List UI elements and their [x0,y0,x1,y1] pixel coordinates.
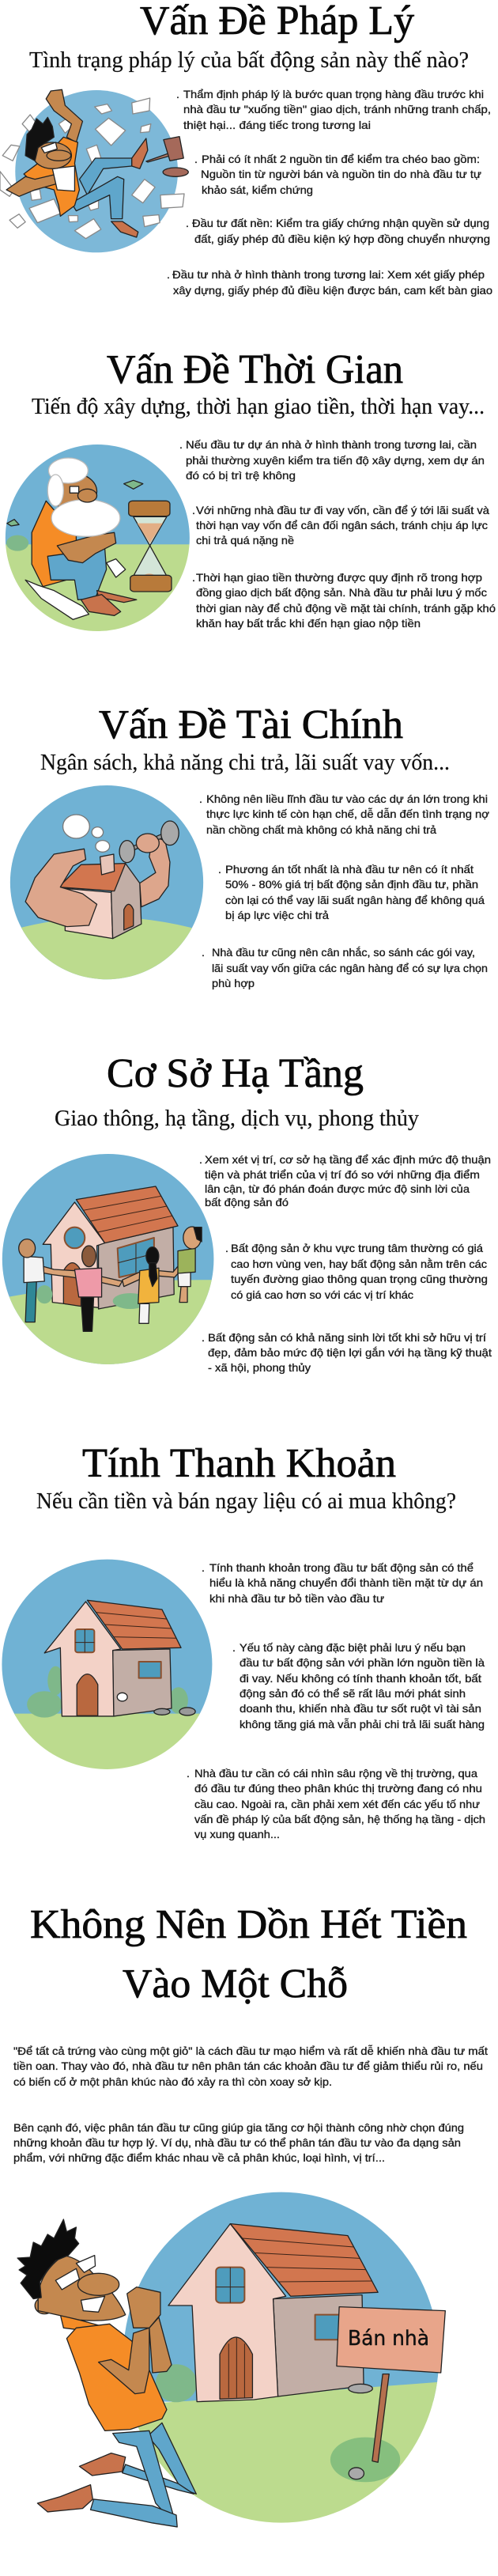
text: legal points: thiệt hại... đáng tiếc trong tương lai [183,119,371,131]
text: time points: . [179,438,183,451]
text: liquidity points: đầu tư bất động sản với phần lớn nguồn tiền là [240,1656,485,1669]
text: liquidity points: Nhà đầu tư cần có cái nhìn sâu rộng về thị trường, qua [194,1767,477,1780]
text: legal points: . [186,217,189,229]
text: infrastructure points: Xem xét vị trí, cơ sở hạ tầng để xác định mức độ thuận [205,1153,491,1166]
title: Vào Một Chỗ [123,1961,348,2007]
text: liquidity points: Yếu tố này càng đặc biệt phải lưu ý nếu bạn [240,1641,466,1654]
text: intro paragraphs: có biến cố ở một phân khúc nào đó xảy ra thì còn xoay sở kịp. [13,2075,332,2088]
text: legal points: đất, giấy phép đủ điều kiện ký hợp đồng chuyển nhượng [194,233,490,245]
text: financial points: nần chồng chất mà không có khả năng chi trả [206,823,436,836]
text: legal points: . [176,88,179,100]
title: Không Nên Dồn Hết Tiền [30,1902,467,1947]
illustration: man pleading before house for sale [17,2191,477,2529]
text: liquidity points: Tính thanh khoản trong đầu tư bất động sản có thể [209,1561,473,1574]
text: infrastructure points: bất động sản đó [205,1196,289,1209]
text: legal points: Phải có ít nhất 2 nguồn tin để kiểm tra chéo bao gồm: [202,153,480,165]
text: infrastructure points: có giá cao hơn so với các vị trí khác [231,1288,413,1301]
illustration: old man and hourglass [0,443,197,634]
text: legal points: . [167,268,170,281]
text: time points: phải thường xuyên kiểm tra tiến độ xây dựng, xem dự án [186,454,485,467]
text: time points: thời gian này để chủ động về mặt tài chính, tránh gặp khó [196,602,496,615]
section: legal issues [0,0,492,297]
text: financial points [199,792,489,989]
text: intro paragraphs: những khoản đầu tư hợp lý. Ví dụ, nhà đầu tư có thể phân tán đầu tư vào đa dạng sản [13,2136,461,2149]
text: infrastructure points: tiện và phát triển của vị trí đó so với những địa điểm [205,1168,480,1181]
text: liquidity points: vụ xung quanh... [194,1828,280,1840]
text: time points [179,438,496,630]
title: Vấn Đề Thời Gian [107,347,403,392]
text: legal points: Đầu tư đất nền: Kiểm tra giấy chứng nhận quyền sử dụng [192,217,489,229]
text: liquidity points: . [187,1767,190,1780]
section: time issues [0,347,496,634]
section: liquidity [0,1441,485,1840]
text: time points: . [192,504,195,516]
text: intro paragraphs: phẩm, với những đặc điểm khác nhau về cả phân khúc, loại hình, vị trí... [13,2151,385,2164]
text: infrastructure points [199,1153,492,1374]
text: financial points: . [218,863,221,876]
text: liquidity points: động sản đó có thể sẽ rất lâu mới phát sinh [240,1687,466,1700]
text: intro paragraphs: "Để tất cả trứng vào cùng một giỏ" là cách đầu tư mạo hiểm và rất dễ khiến nhà đầu tư mất [13,2045,488,2057]
text: infrastructure points: tuyến đường giao thông quan trọng cũng thường [231,1273,488,1285]
text: infrastructure points: cao hơn vùng ven, hay bất động sản nằm trên các [231,1258,487,1270]
text: legal points: Đầu tư nhà ở hình thành trong tương lai: Xem xét giấy phép [172,268,485,281]
text: legal points [167,88,492,297]
text: time points: chi trả quá nặng nề [196,534,294,547]
subtitle: Nếu cần tiền và bán ngay liệu có ai mua không? [36,1489,456,1514]
text: liquidity points: vấn đề pháp lý của bất động sản, hệ thống hạ tầng - dịch [194,1813,485,1825]
title [30,1902,467,2007]
text: financial points: bị áp lực việc chi trả [225,909,329,921]
text: legal points: Nguồn tin từ người bán và nguồn tin do nhà đầu tư tự [201,168,481,180]
text: liquidity points: không tăng giá mà vẫn phải chi trả lãi suất hàng [240,1718,485,1731]
text: financial points: Nhà đầu tư cũng nên cân nhắc, so sánh các gói vay, [212,946,475,959]
text: intro paragraphs [13,2045,488,2164]
text: legal points: nhà đầu tư "xuống tiền" giao dịch, tránh những tranh chấp, [183,103,491,115]
text: time points: đó có bị trì trệ không [186,469,296,482]
text: intro paragraphs: tiền oan. Thay vào đó, nhà đầu tư nên phân tán các khoản đầu tư để giảm thiểu rủi ro, nếu [13,2060,483,2072]
text: infrastructure points: lân cận, từ đó phán đoán được mức độ sinh lời của [205,1182,470,1195]
text: intro paragraphs: Bên cạnh đó, việc phân tán đầu tư cũng giúp gia tăng cơ hội thành công nhờ chọn đúng [13,2121,464,2134]
text: time points: Nếu đầu tư dự án nhà ở hình thành trong tương lai, cần [186,438,477,451]
text: financial points: Phương án tốt nhất là nhà đầu tư nên có ít nhất [225,863,473,876]
text: time points: khăn hay bất trắc khi đến hạn giao nộp tiền [196,617,421,630]
text: legal points: xây dựng, giấy phép đủ điều kiện được bán, cam kết bàn giao [173,284,492,297]
text: legal points: Thẩm định pháp lý là bước quan trọng hàng đầu trước khi [183,88,484,100]
text: infrastructure points: . [202,1331,205,1344]
text: liquidity points: . [232,1641,236,1654]
text: infrastructure points: - xã hội, phong thủy [208,1361,311,1374]
title: Vấn Đề Tài Chính [99,702,403,747]
section: financial issues [0,702,489,989]
text: liquidity points: cầu cao. Ngoài ra, cần phải xem xét đến các yếu tố như [194,1798,480,1810]
illustration: muscular house lifting dumbbell [9,785,204,979]
sign text: Bán nhà [348,2327,429,2351]
text: liquidity points: doanh thu, khiến nhà đầu tư sốt ruột vì tài sản [240,1702,481,1715]
illustration: cracked house [0,1558,216,1772]
text: liquidity points [187,1561,485,1840]
subtitle: Tiến độ xây dựng, thời hạn giao tiền, thời hạn vay... [32,395,485,419]
text: financial points: . [199,792,202,805]
illustration: man falling among papers and gavel [0,89,188,252]
text: infrastructure points: Bất động sản có khả năng sinh lời tốt khi sở hữu vị trí [208,1331,486,1344]
text: time points: . [192,571,195,584]
text: infrastructure points: đẹp, đảm bảo mức độ tiện lợi gắn với hạ tầng kỹ thuật [208,1346,492,1359]
text: time points: Thời hạn giao tiền thường được quy định rõ trong hợp [196,571,482,584]
text: financial points: còn lại có thể vay lãi suất ngân hàng để không quá [225,894,485,906]
text: infrastructure points: Bất động sản ở khu vực trung tâm thường có giá [231,1242,483,1254]
title: Cơ Sở Hạ Tầng [107,1051,364,1096]
text: time points: thời hạn vay vốn để cân đối ngân sách, tránh chịu áp lực [196,519,488,531]
text: legal points: khảo sát, kiểm chứng [202,183,313,196]
illustration: people holding hands around house [0,1152,216,1366]
text: infrastructure points: . [199,1153,202,1166]
subtitle: Tình trạng pháp lý của bất động sản này thế nào? [29,48,469,73]
text: liquidity points: đó đầu tư đúng theo phân khúc thị trường đang có nhu [194,1782,482,1795]
section: infrastructure [0,1051,492,1374]
section: diversification [13,1902,488,2529]
subtitle: Giao thông, hạ tầng, dịch vụ, phong thủy [55,1106,419,1131]
title: Tính Thanh Khoản [82,1441,396,1486]
text: financial points: . [202,946,205,959]
text: financial points: lãi suất vay vốn giữa các ngân hàng để có sự lựa chọn [212,962,488,974]
text: liquidity points: đi vay. Nếu không có tính thanh khoản tốt, bất [240,1672,481,1685]
text: financial points: Không nên liều lĩnh đầu tư vào các dự án lớn trong khi [206,792,488,805]
subtitle: Ngân sách, khả năng chi trả, lãi suất vay vốn... [40,751,450,775]
text: time points: đồng giao dịch bất động sản. Nhà đầu tư phải lưu ý mốc [196,586,487,599]
text: infrastructure points: . [225,1242,228,1254]
text: liquidity points: hiểu là khả năng chuyển đổi thành tiền mặt từ dự án [209,1576,483,1589]
text: time points: Với những nhà đầu tư đi vay vốn, cần để ý tới lãi suất và [196,504,489,516]
text: legal points: . [194,153,198,165]
text: liquidity points: khi nhà đầu tư bỏ tiền vào đầu tư [209,1592,384,1605]
text: financial points: phù hợp [212,977,255,989]
text: financial points: thực lực kinh tế còn hạn chế, dễ dẫn đến tình trạng nợ [206,808,489,820]
text: liquidity points: . [202,1561,205,1574]
text: financial points: 50% - 80% giá trị bất động sản định đầu tư, phần [225,878,478,891]
